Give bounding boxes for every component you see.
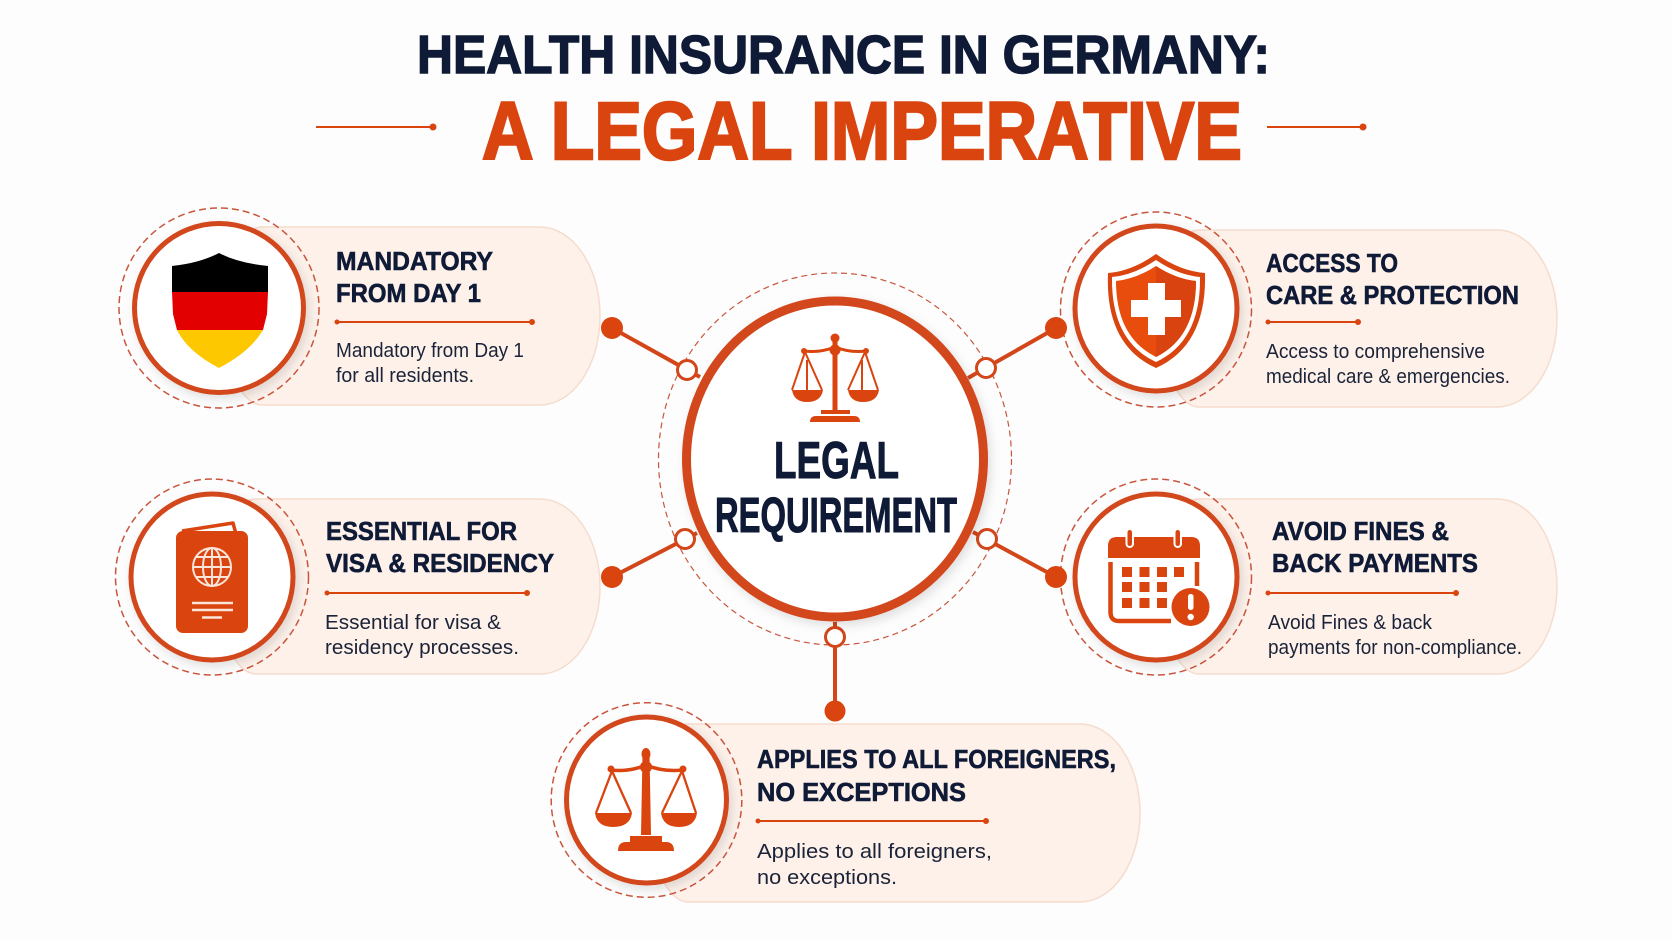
panel: mandatory from day 1	[119, 208, 600, 408]
heading	[757, 744, 1116, 807]
description: for all residents.	[336, 365, 474, 387]
heading	[326, 516, 554, 578]
heading: CARE & PROTECTION	[1266, 280, 1519, 310]
heading: BACK PAYMENTS	[1272, 548, 1478, 578]
description: Mandatory from Day 1	[336, 340, 524, 362]
title line 2: A LEGAL IMPERATIVE	[482, 86, 1242, 177]
dashed ring	[119, 208, 319, 408]
title accent right	[1267, 124, 1366, 130]
description: payments for non-compliance.	[1268, 637, 1522, 659]
description: Access to comprehensive	[1266, 341, 1485, 363]
icon: scales of justice	[792, 334, 879, 422]
description	[1266, 341, 1510, 388]
connector: middle right	[973, 530, 1056, 577]
circle	[1075, 226, 1237, 391]
heading: MANDATORY	[336, 246, 493, 276]
hub dashed ring	[658, 273, 1012, 645]
description: Avoid Fines & back	[1268, 612, 1433, 634]
connector: bottom	[824, 622, 846, 722]
heading: ESSENTIAL FOR	[326, 516, 517, 546]
panel: avoid fines and back payments	[1045, 479, 1557, 675]
heading: APPLIES TO ALL FOREIGNERS,	[757, 744, 1116, 774]
description	[1268, 612, 1522, 659]
pill background	[218, 499, 600, 674]
description: Applies to all foreigners,	[757, 841, 992, 863]
connector: top left	[601, 317, 700, 380]
heading: NO EXCEPTIONS	[757, 777, 966, 807]
divider	[1266, 319, 1361, 325]
heading: FROM DAY 1	[336, 278, 481, 308]
dot over ring	[1045, 317, 1067, 339]
circle	[131, 494, 293, 660]
description: residency processes.	[325, 637, 519, 659]
description: medical care & emergencies.	[1266, 366, 1510, 388]
dashed ring	[551, 703, 742, 897]
panel: applies to all foreigners	[551, 703, 1140, 902]
divider	[756, 818, 989, 824]
heading: AVOID FINES &	[1272, 516, 1449, 546]
dashed ring	[1060, 479, 1252, 675]
heading	[1266, 248, 1519, 310]
description: Essential for visa &	[325, 612, 502, 634]
divider	[324, 590, 530, 596]
pill background	[1161, 499, 1557, 674]
divider	[1266, 590, 1459, 596]
icon: passport	[176, 523, 248, 633]
icon: medical shield	[1108, 254, 1205, 368]
hub label line 1: LEGAL	[774, 432, 899, 490]
divider	[334, 319, 535, 325]
connector: top right	[968, 328, 1056, 378]
pill background	[224, 227, 600, 405]
connector: middle left	[601, 530, 697, 588]
circle	[566, 717, 726, 883]
title accent left	[316, 124, 436, 130]
description	[325, 612, 519, 659]
dashed ring	[116, 479, 308, 675]
description	[757, 841, 992, 889]
panel: access to care and protection	[1045, 212, 1557, 407]
description	[336, 340, 524, 387]
hub label line 2: REQUIREMENT	[715, 489, 957, 543]
panel: essential for visa and residency	[116, 479, 600, 675]
hub ring	[686, 301, 984, 617]
pill background	[1161, 230, 1557, 407]
central hub	[686, 301, 984, 617]
title	[316, 25, 1366, 177]
icon: german flag shield	[172, 253, 268, 368]
heading: ACCESS TO	[1266, 248, 1398, 278]
heading	[336, 246, 493, 308]
dashed ring	[1060, 212, 1252, 407]
title line 1: HEALTH INSURANCE IN GERMANY:	[417, 25, 1270, 85]
heading: VISA & RESIDENCY	[326, 548, 554, 578]
description: no exceptions.	[757, 867, 897, 889]
pill background	[650, 724, 1140, 902]
dot over ring	[1045, 566, 1067, 588]
icon: calendar with alert	[1108, 529, 1210, 626]
connectors	[601, 317, 1056, 722]
circle	[134, 224, 304, 392]
icon: scales of justice	[595, 748, 697, 851]
circle	[1075, 494, 1237, 660]
heading	[1272, 516, 1478, 578]
